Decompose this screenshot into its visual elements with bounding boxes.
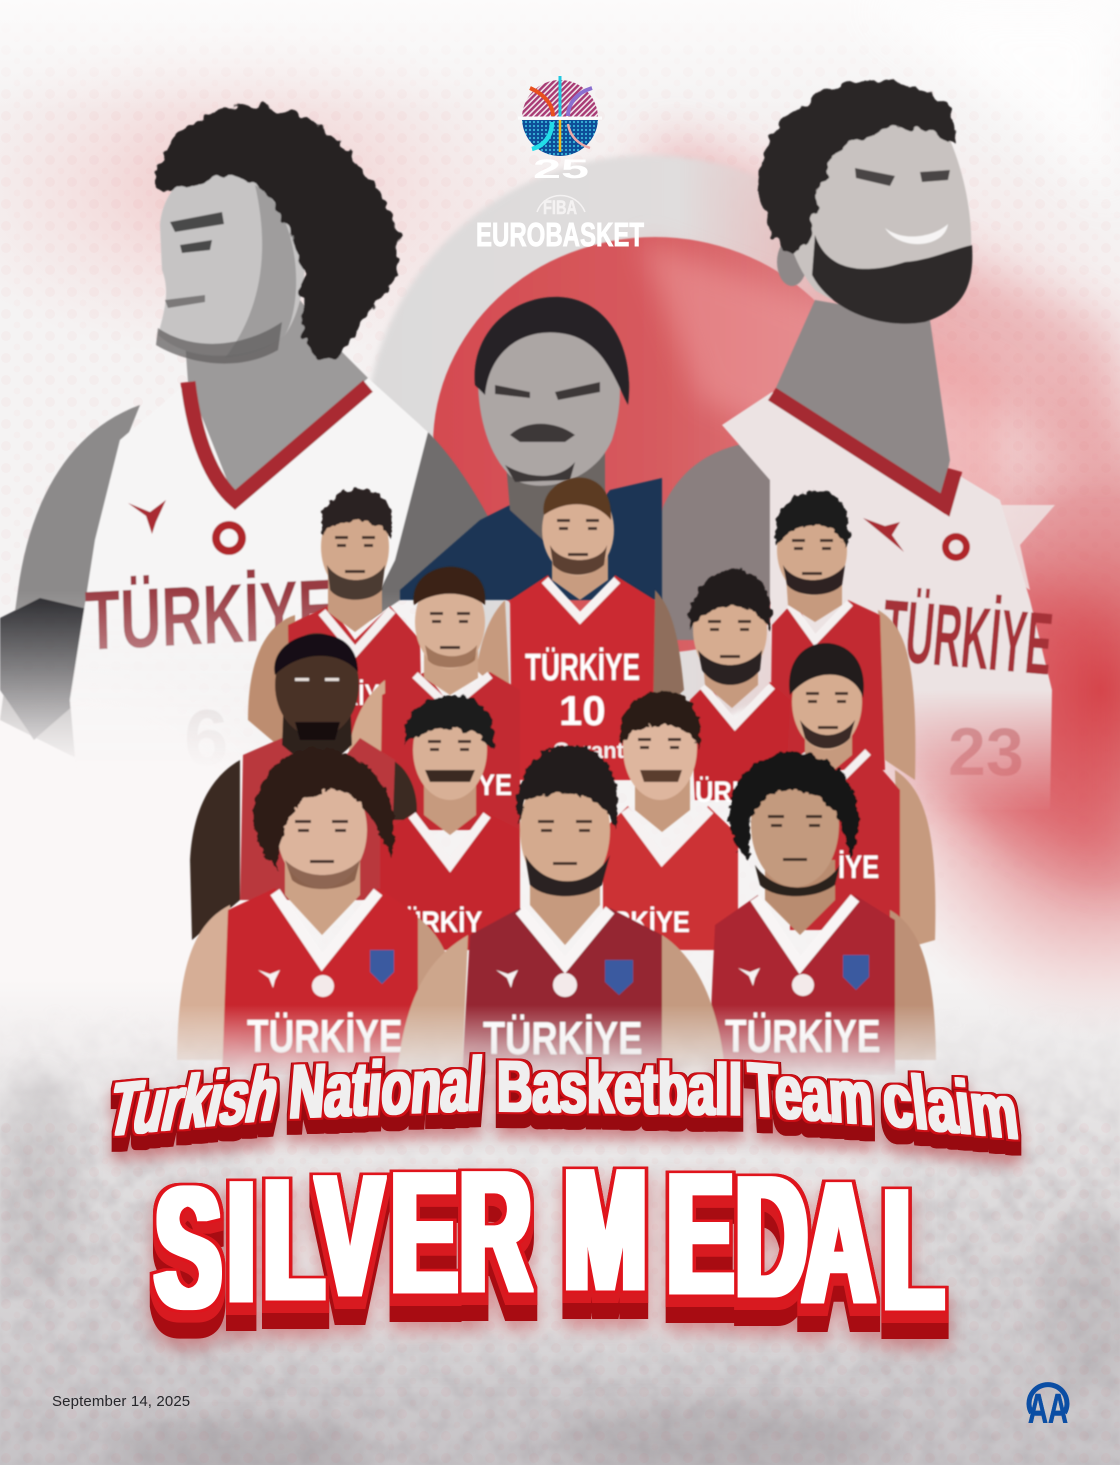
collar	[772, 394, 955, 505]
team member: third row left: ÜRKİY	[403, 905, 483, 938]
jersey badge	[212, 521, 246, 555]
team member: back centre, number 10: TÜRKİYE	[525, 645, 640, 688]
smile	[885, 224, 948, 244]
face	[158, 164, 305, 356]
team member: third row right	[603, 691, 738, 950]
team member: dark-skinned player	[190, 633, 417, 940]
sleeve	[0, 598, 92, 740]
logo: FIBA EuroBasket 25	[476, 76, 644, 253]
right arm	[370, 425, 495, 620]
background: red and white wash	[0, 0, 1120, 1004]
team member: second row left: YE	[478, 768, 512, 801]
headline: Turkish National Basketball Team claim: Team	[747, 1046, 874, 1141]
jacket	[400, 478, 662, 600]
headline: Turkish National Basketball Team claim	[101, 1041, 1022, 1155]
date: September 14, 2025	[52, 1393, 190, 1410]
eye, brow and stubble	[170, 212, 224, 253]
player: large left portrait	[0, 105, 495, 790]
left arm	[0, 405, 140, 760]
jersey number: 23	[948, 714, 1024, 790]
hair	[760, 80, 956, 255]
team member: front left: TÜRKİYE	[247, 1011, 402, 1062]
team member: back centre, number 10	[476, 478, 684, 780]
team member: back left	[248, 489, 422, 760]
shadow side of face	[225, 185, 296, 358]
face	[786, 119, 971, 312]
crowd background fading in at bottom	[0, 980, 1120, 1465]
team member: back centre, number 10: Garant	[553, 738, 625, 763]
hair	[475, 297, 629, 405]
puma mark	[128, 500, 166, 534]
ball upper half	[522, 80, 598, 156]
jersey	[722, 392, 1052, 810]
ball lower half	[522, 80, 598, 156]
flag: crescent and star	[365, 155, 1055, 725]
jersey	[70, 378, 428, 790]
headline: Turkish National Basketball Team claim: National	[287, 1041, 485, 1135]
team member: front centre: TÜRKİYE	[483, 1012, 642, 1064]
face	[478, 323, 620, 486]
rim	[518, 116, 602, 120]
FIBA arc	[537, 196, 585, 212]
badge	[312, 975, 334, 997]
headline: Turkish National Basketball Team claim: claim	[878, 1057, 1022, 1155]
coach portrait	[400, 297, 662, 600]
puma mark	[863, 518, 904, 552]
headline: SILVER MEDAL: SILVER MEDAL	[155, 1134, 944, 1346]
logo: Anadolu Agency AA	[1028, 1385, 1068, 1432]
player: large right portrait	[648, 80, 1056, 810]
brows and mustache	[495, 382, 600, 482]
headline: Turkish National Basketball Team claim: Turkish	[101, 1051, 287, 1153]
eyes	[855, 168, 950, 186]
hair	[155, 105, 399, 360]
team member: second row far right: İYE	[838, 850, 879, 886]
ear	[777, 238, 807, 286]
team member: back right	[770, 491, 915, 780]
left arm	[648, 440, 800, 640]
badge	[942, 533, 970, 561]
neck	[185, 300, 368, 500]
team member: third row left	[380, 695, 520, 950]
headline: Turkish National Basketball Team claim: Basketball	[497, 1047, 742, 1131]
beard	[812, 235, 972, 324]
neck	[505, 440, 605, 555]
team member: third row right: RKİYE	[612, 905, 690, 938]
team member: back centre, number 10: 10	[559, 687, 606, 734]
25: 25	[533, 154, 589, 184]
team member: front right	[708, 752, 936, 1075]
team member: front left	[177, 748, 455, 1075]
jersey text: TÜRKİYE	[84, 562, 337, 669]
team member: second row right: ÜRK	[695, 775, 750, 808]
FIBA: FIBA	[543, 198, 577, 219]
team member: front centre	[397, 745, 725, 1075]
logo: Anadolu Agency AA: AA	[1028, 1385, 1068, 1432]
jersey text: TÜRKİYE	[878, 581, 1056, 694]
team member: back left: KİY	[342, 678, 380, 712]
neck	[775, 300, 950, 505]
team group	[177, 478, 936, 1075]
EUROBASKET: EUROBASKET	[476, 216, 644, 253]
team member: front right: TÜRKİYE	[725, 1011, 880, 1062]
team member: second row far right	[789, 643, 935, 950]
team member: second row left	[348, 567, 520, 830]
jersey number: 6	[184, 693, 228, 782]
collar	[188, 382, 368, 500]
team member: second row right	[689, 569, 790, 808]
